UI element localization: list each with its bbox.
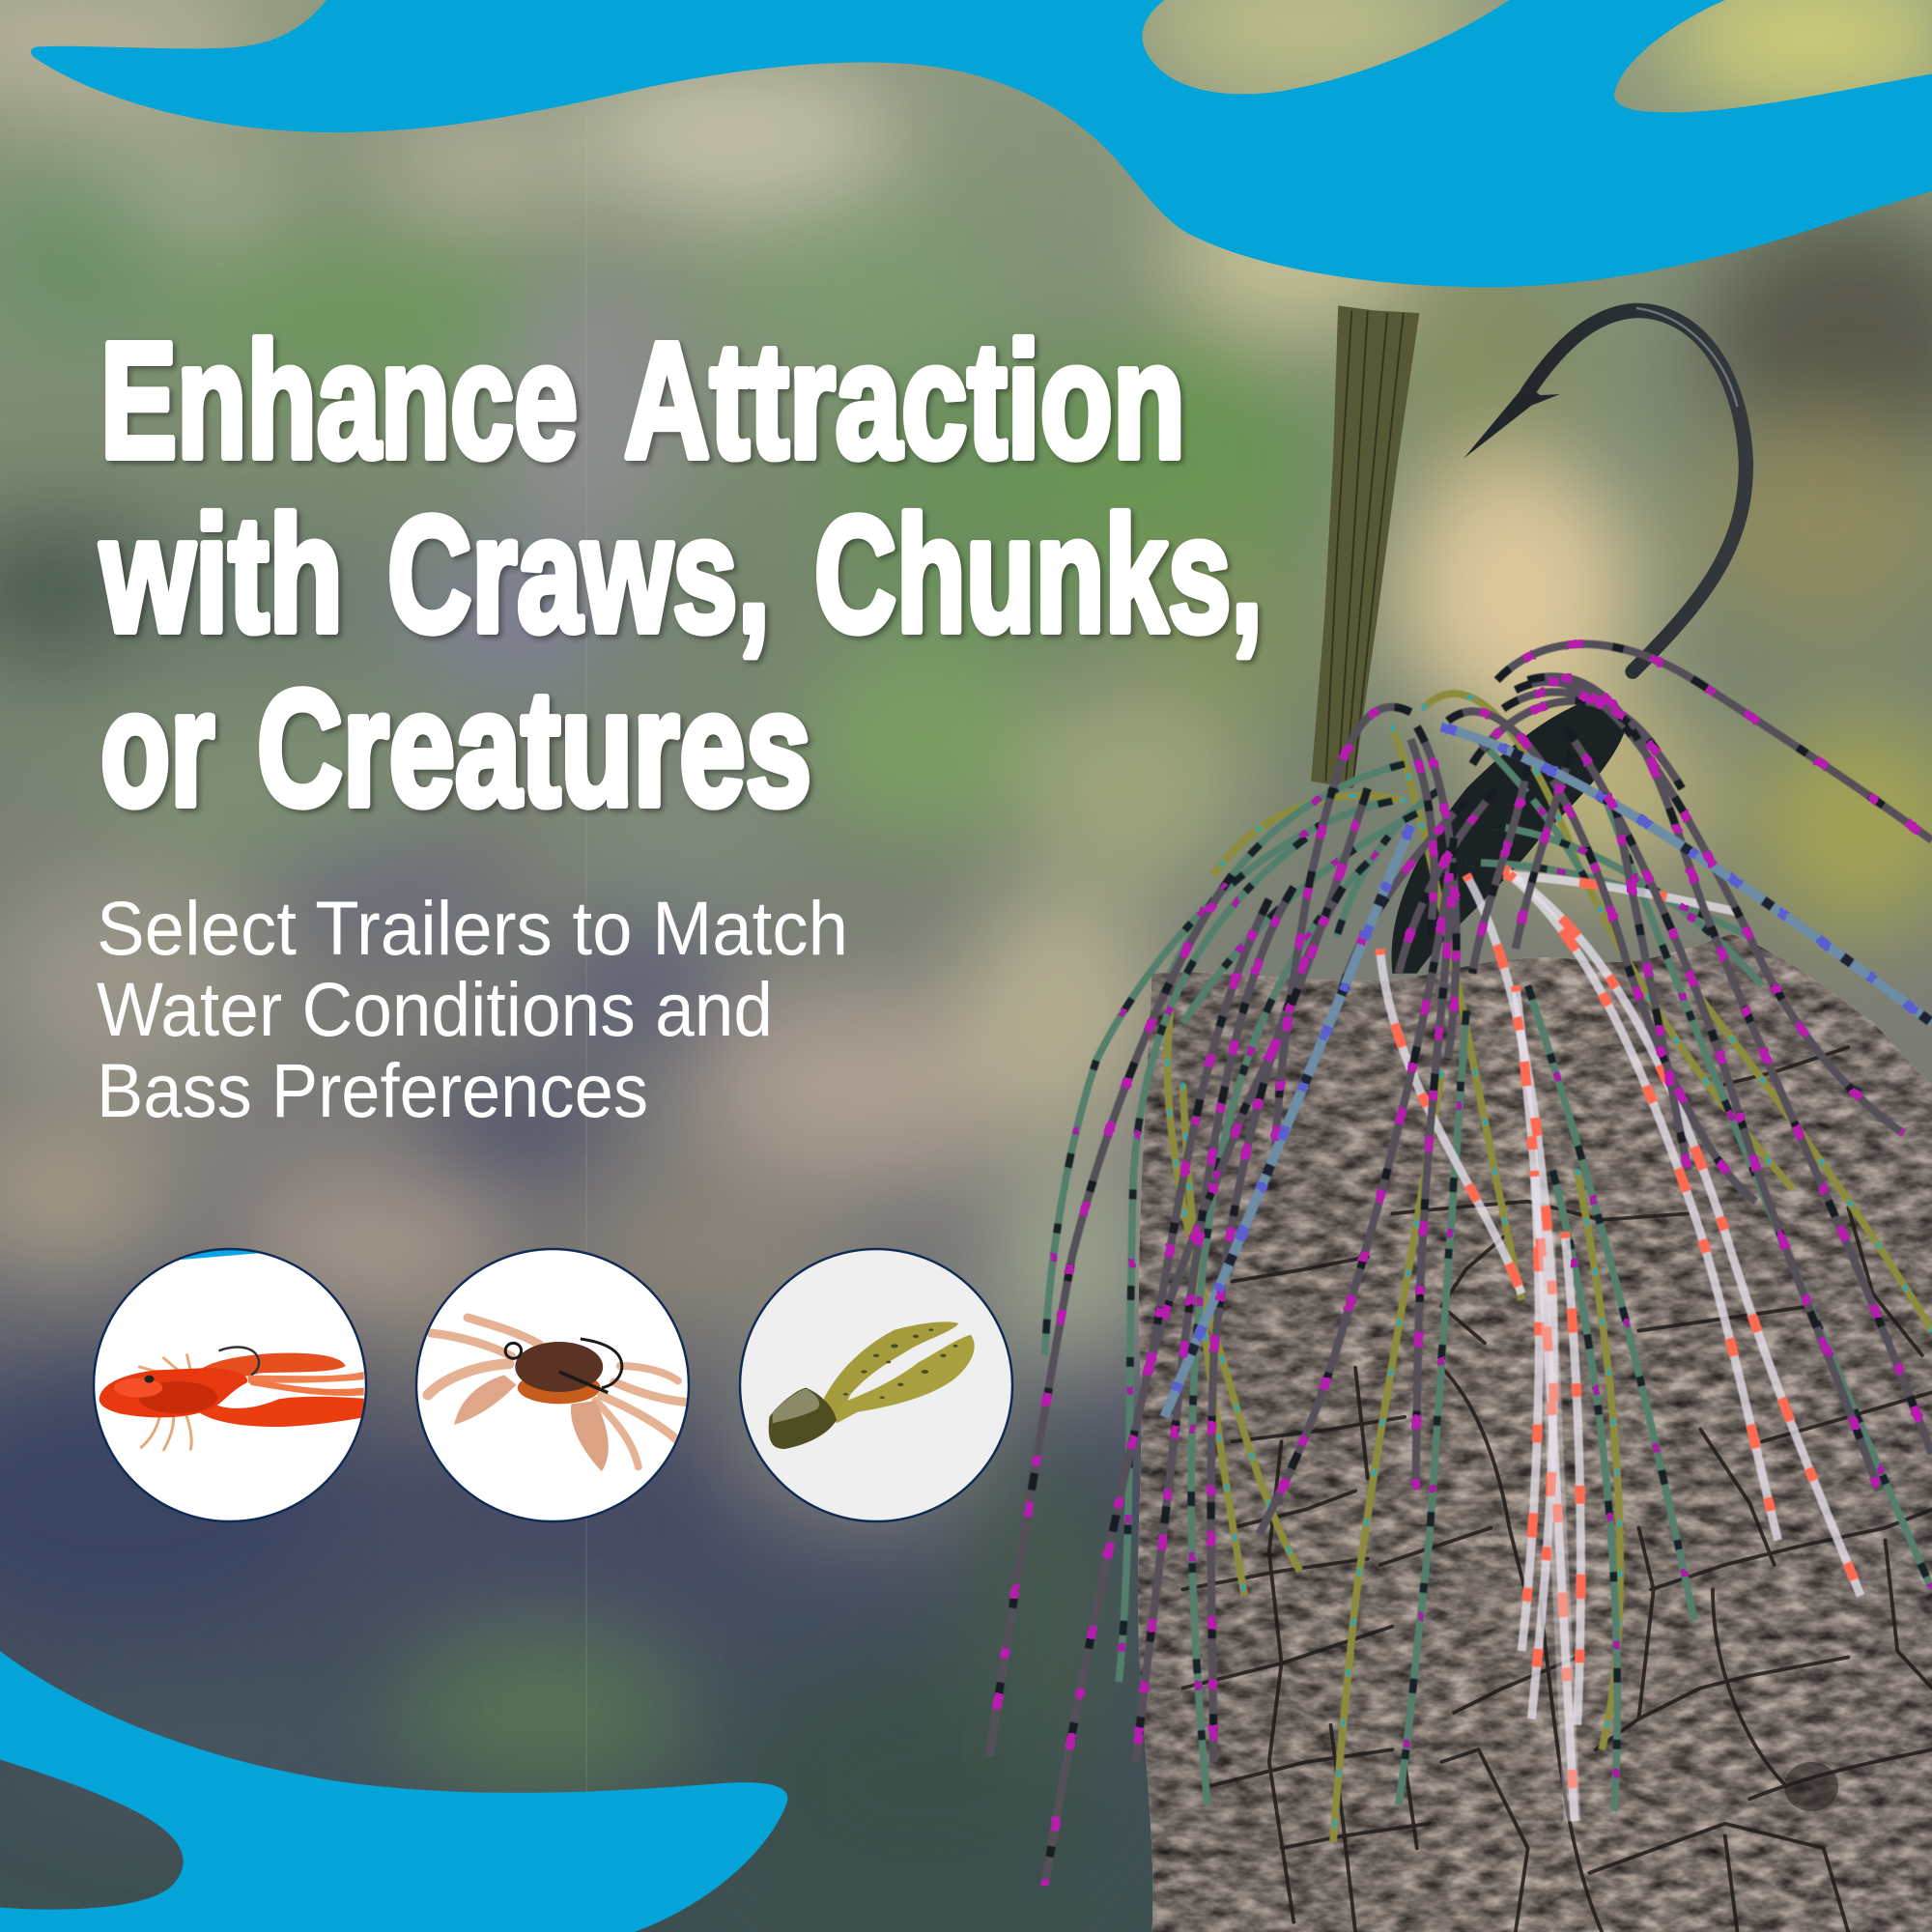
- title: [99, 309, 1263, 840]
- title: Creatures: [257, 657, 811, 840]
- weed guard bristles: [1311, 305, 1419, 788]
- title: Chunks,: [814, 483, 1263, 667]
- trailer circle: creature: [740, 1249, 1012, 1521]
- subtitle: Select Trailers to Match: [97, 885, 848, 971]
- title: or: [100, 657, 214, 840]
- jig head collar: [1392, 696, 1627, 974]
- hook: [1463, 308, 1746, 671]
- trailer circle: craw: [94, 1248, 366, 1521]
- title: Craws,: [387, 483, 770, 667]
- subtitle: Water Conditions and: [97, 966, 773, 1052]
- subtitle: Bass Preferences: [97, 1047, 648, 1133]
- title: Enhance: [100, 309, 578, 493]
- subtitle: [97, 885, 848, 1133]
- tree stump with bark texture: [1138, 934, 1932, 1932]
- title: Attraction: [624, 309, 1185, 493]
- bottom-left blue wave shape: [0, 1651, 787, 1932]
- title: with: [99, 483, 343, 667]
- trailer circle: crab: [416, 1249, 689, 1521]
- top blue wave shape: [31, 0, 1932, 287]
- jig skirt strands: [989, 644, 1932, 1886]
